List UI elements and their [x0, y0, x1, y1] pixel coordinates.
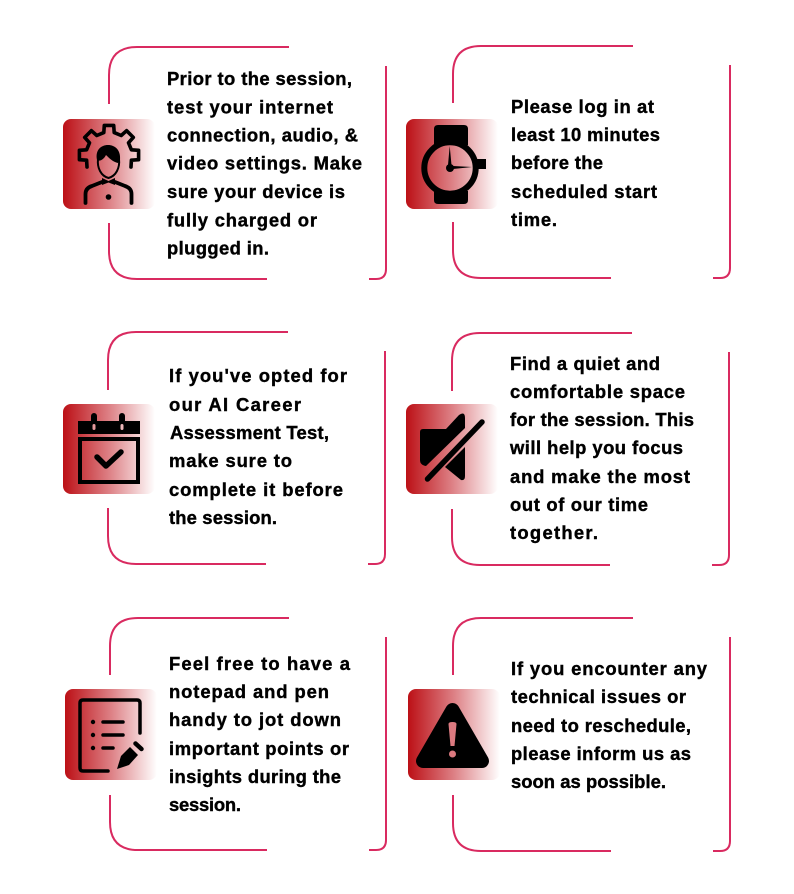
- panel: test your setup: [63, 47, 386, 279]
- frame: [453, 618, 730, 851]
- text block: time.: [511, 209, 557, 230]
- text block: test your internet: [167, 96, 333, 118]
- text block: will help you focus: [509, 437, 683, 458]
- text block: [169, 365, 347, 528]
- frame: [108, 332, 385, 564]
- text block: for the session. This: [510, 409, 694, 430]
- text block: scheduled start: [511, 181, 657, 202]
- frame: [453, 46, 730, 278]
- text block: the session.: [169, 507, 277, 528]
- text block: Find a quiet and: [510, 353, 660, 374]
- text block: If you've opted for: [169, 365, 347, 386]
- text block: together.: [510, 522, 598, 543]
- icon: notepad and pen: [65, 689, 157, 780]
- text block: [511, 96, 660, 230]
- text block: insights during the: [169, 766, 341, 787]
- text block: Please log in at: [511, 96, 654, 117]
- icon: warning triangle: [408, 689, 500, 780]
- panel: notepad and pen: [65, 618, 386, 850]
- text block: complete it before: [169, 479, 343, 500]
- icon: muted speaker: [406, 404, 498, 494]
- text block: technical issues or: [511, 686, 686, 707]
- panel: quiet space: [406, 333, 729, 565]
- text block: comfortable space: [510, 381, 685, 402]
- text block: session.: [169, 794, 241, 815]
- text block: [167, 68, 362, 258]
- text block: Prior to the session,: [167, 68, 352, 89]
- text block: Feel free to have a: [169, 653, 351, 674]
- text block: important points or: [169, 738, 349, 759]
- panel: technical issues: [408, 618, 730, 851]
- text block: please inform us as: [511, 743, 691, 764]
- text block: [169, 653, 351, 815]
- text block: sure your device is: [167, 181, 345, 202]
- frame: [452, 333, 729, 565]
- text block: video settings. Make: [167, 152, 362, 174]
- text block: and make the most: [510, 466, 690, 487]
- frame: [110, 618, 386, 850]
- text block: handy to jot down: [169, 709, 341, 730]
- panel: career assessment test: [63, 332, 385, 564]
- text block: make sure to: [169, 450, 292, 471]
- icon: calendar with check: [63, 404, 155, 494]
- text block: If you encounter any: [511, 658, 708, 679]
- icon: wristwatch: [406, 119, 498, 209]
- text block: [509, 353, 694, 543]
- text block: notepad and pen: [169, 681, 329, 702]
- text block: soon as possible.: [511, 771, 666, 792]
- icon: person with gear: [63, 119, 155, 209]
- text block: least 10 minutes: [511, 124, 660, 145]
- text block: Assessment Test,: [170, 422, 329, 443]
- text block: [511, 658, 708, 792]
- frame: [109, 47, 386, 279]
- panel: log in early: [406, 46, 730, 278]
- text block: fully charged or: [167, 210, 317, 230]
- text block: our AI Career: [169, 394, 301, 415]
- text block: before the: [511, 152, 603, 173]
- text block: plugged in.: [167, 238, 269, 258]
- text block: need to reschedule,: [511, 715, 691, 736]
- text block: out of our time: [510, 494, 648, 515]
- text block: connection, audio, &: [167, 124, 358, 146]
